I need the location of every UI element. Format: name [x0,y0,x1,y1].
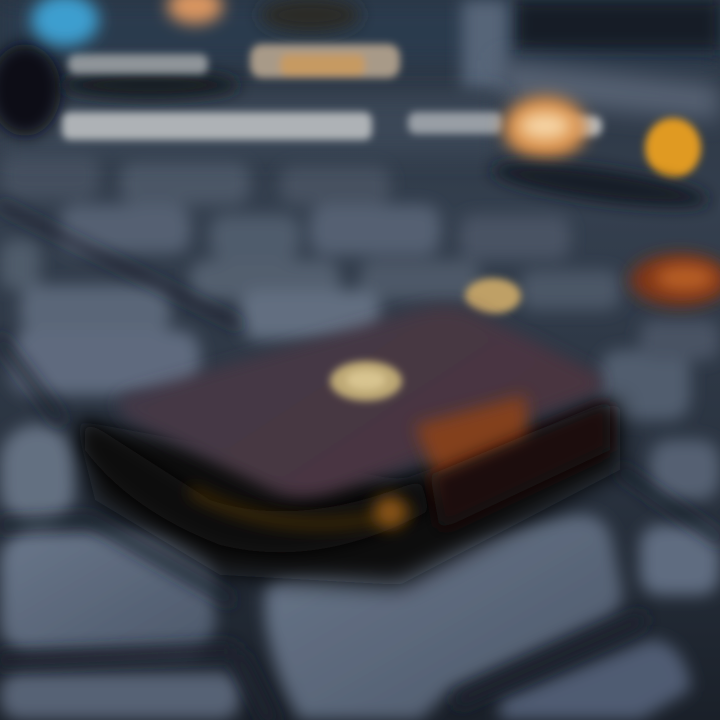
wallet coin [330,361,402,401]
title text blur [62,44,602,140]
keyboard keys [0,150,720,720]
glowing coins top [31,0,720,314]
wallet side [85,420,430,552]
wallet clasp [415,395,530,500]
top dark band [0,0,720,155]
wallet [75,306,620,585]
key gaps [0,205,720,720]
wallet top face [119,306,603,498]
wallet shadow [75,400,620,585]
amber edge [190,490,410,524]
